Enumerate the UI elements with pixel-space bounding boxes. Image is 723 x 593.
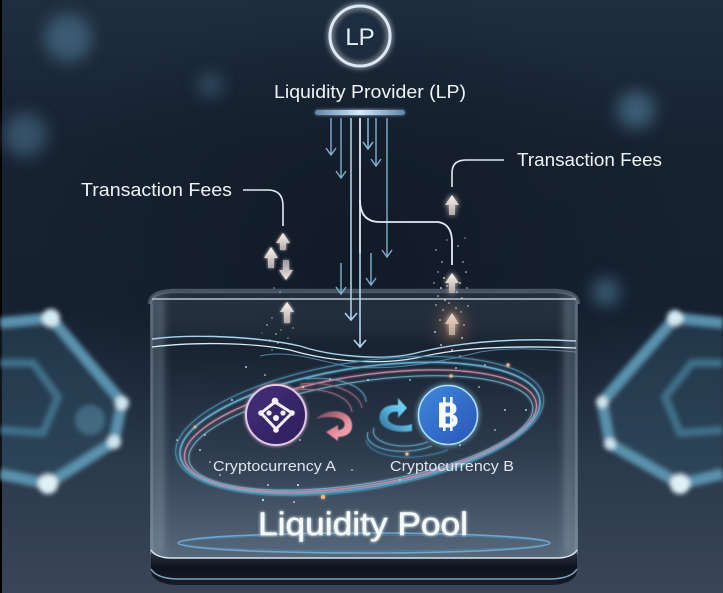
icon: bitcoin symbol: B [437, 394, 459, 436]
coin: cryptocurrency A [246, 385, 306, 445]
glass tank [150, 291, 578, 560]
fee callout line left [243, 190, 283, 226]
LP badge: LP [345, 24, 375, 51]
transaction fees label right: Transaction Fees [517, 150, 662, 170]
fee connector line right [360, 200, 452, 265]
left hexagon decoration [0, 309, 129, 494]
provider label: Liquidity Provider (LP) [274, 82, 466, 102]
coin: cryptocurrency B [418, 386, 478, 444]
fee particles [262, 237, 469, 369]
water surface [152, 336, 576, 368]
icon: network diamond [258, 398, 295, 433]
right hexagon decoration [596, 310, 723, 494]
fee arrows right [445, 195, 459, 335]
provider bar [315, 110, 405, 115]
glass rim [150, 291, 578, 550]
transaction fees label left: Transaction Fees [81, 180, 232, 200]
deposit arrows [326, 118, 392, 347]
cryptocurrency B label: Cryptocurrency B [390, 458, 514, 475]
orbit rings [166, 334, 553, 518]
warm glow behind right arrows [438, 305, 466, 345]
title: liquidity pool: Liquidity Pool [258, 506, 468, 542]
background bokeh lights [3, 14, 655, 306]
fee arrows left [264, 233, 294, 323]
LP badge [330, 6, 390, 66]
tank base [151, 550, 577, 585]
tank floor ring [178, 533, 550, 553]
fee callout line right [452, 160, 504, 187]
LP centre line [359, 118, 361, 253]
orbit sparkles [176, 363, 527, 503]
swap arrow blue [379, 398, 412, 432]
cryptocurrency A label: Cryptocurrency A [213, 458, 336, 475]
swap arrow pink [316, 411, 352, 441]
